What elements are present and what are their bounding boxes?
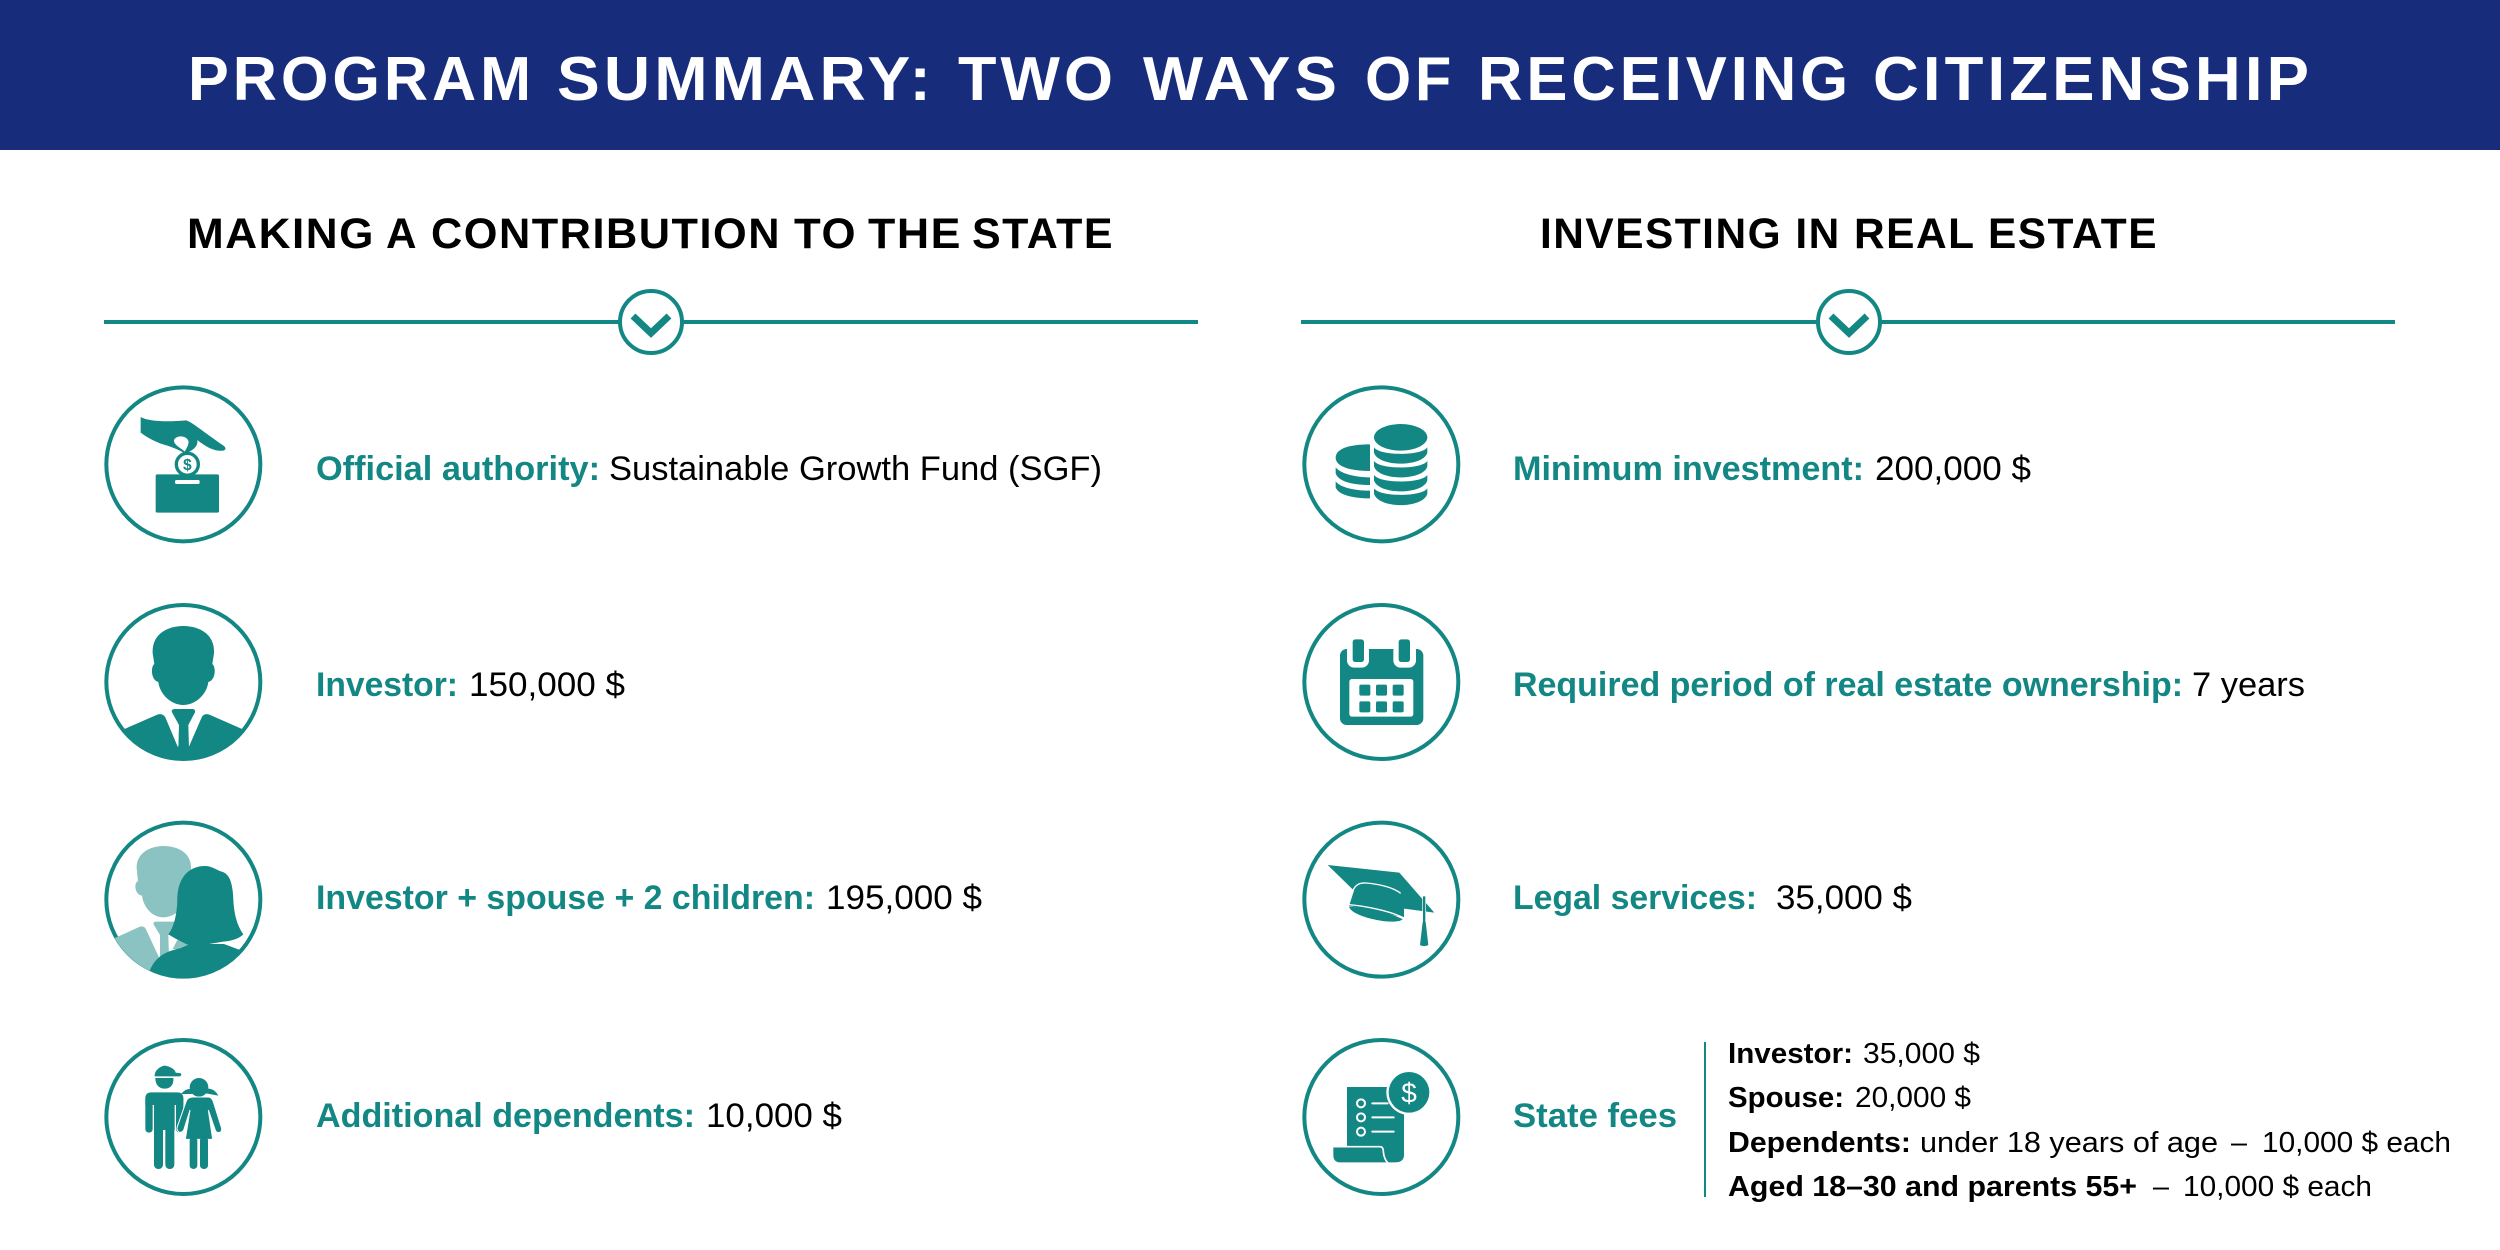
text block: state fee details: 35,000 $ (1863, 1038, 1980, 1070)
icon: children (106, 1040, 260, 1194)
icon: fee document (1304, 1040, 1458, 1194)
text block: state fee details: Dependents: (1728, 1127, 1911, 1159)
title: SUMMARY: (557, 45, 935, 114)
text block: state fee details: 10,000 $ each (2262, 1127, 2451, 1159)
heading: contribution (187, 210, 1114, 258)
heading: contribution: A (386, 210, 418, 258)
text block: state fee details: under 18 years of age (1920, 1127, 2218, 1159)
text block: state fee details (1728, 1038, 2451, 1203)
heading: contribution: MAKING (187, 210, 375, 258)
icon: coin stacks (1304, 387, 1458, 541)
title: CITIZENSHIP (1873, 45, 2313, 114)
heading: contribution: THE (868, 210, 962, 258)
text block: state fee details: Aged 18–30 and parents 55+ (1728, 1171, 2137, 1203)
row: ownership period: Required period of real estate ownership: (1513, 666, 2183, 704)
title: PROGRAM (188, 45, 535, 114)
divider with chevron (1301, 291, 2395, 353)
text block: state fee details: Spouse: (1728, 1082, 1844, 1114)
title: WAYS (1143, 45, 1341, 114)
title: TWO (958, 45, 1117, 114)
title (188, 45, 2313, 114)
heading: real estate: INVESTING IN REAL ESTATE (1540, 210, 2158, 258)
row: investor: Investor: (316, 666, 458, 704)
row: legal services: 35,000 $ (1776, 879, 1912, 917)
row: investor (316, 666, 625, 704)
icon: hand dropping coin into box (106, 387, 260, 541)
panel: investing in real estate (1301, 210, 2451, 1203)
row: minimum investment: 200,000 $ (1875, 450, 2031, 488)
row: ownership period: 7 years (2192, 666, 2305, 704)
row: legal services (1513, 879, 1912, 917)
icon: hand dropping coin into box: $ (183, 457, 192, 474)
row: minimum investment (1513, 450, 2031, 488)
icon: fee document: $ (1401, 1077, 1417, 1108)
icon: graduation cap (1304, 823, 1458, 977)
row: additional dependents: Additional dependents: (316, 1097, 695, 1135)
header banner (0, 0, 2500, 150)
text block: state fee details: – (2231, 1127, 2248, 1159)
row: official authority (316, 450, 1102, 488)
text block: state fee details: 20,000 $ (1855, 1082, 1971, 1114)
divider: state fees (1704, 1042, 1706, 1197)
text block: state fee details: Investor: (1728, 1038, 1853, 1070)
row: legal services: Legal services: (1513, 879, 1757, 917)
row: official authority: Sustainable Growth Fund (SGF) (609, 450, 1102, 488)
text block: state fee details: – (2153, 1171, 2170, 1203)
heading: contribution: TO (794, 210, 857, 258)
text block: state fee details: 10,000 $ each (2183, 1171, 2372, 1203)
title: OF (1365, 45, 1455, 114)
row: investor, spouse and children: Investor + spouse + 2 children: (316, 879, 815, 917)
heading: contribution: STATE (972, 210, 1114, 258)
divider with chevron (104, 291, 1198, 353)
label: state fees: State fees (1513, 1097, 1677, 1135)
icon: investor (106, 605, 260, 765)
panel: making a contribution to the state (104, 210, 1198, 1194)
row: investor, spouse and children: 195,000 $ (826, 879, 982, 917)
row: official authority: Official authority: (316, 450, 600, 488)
title: RECEIVING (1478, 45, 1852, 114)
icon: calendar (1304, 605, 1458, 759)
row: investor: 150,000 $ (469, 666, 625, 704)
row: additional dependents: 10,000 $ (706, 1097, 842, 1135)
row: minimum investment: Minimum investment: (1513, 450, 1864, 488)
icon: investor and spouse (106, 823, 260, 987)
heading: contribution: CONTRIBUTION (431, 210, 781, 258)
